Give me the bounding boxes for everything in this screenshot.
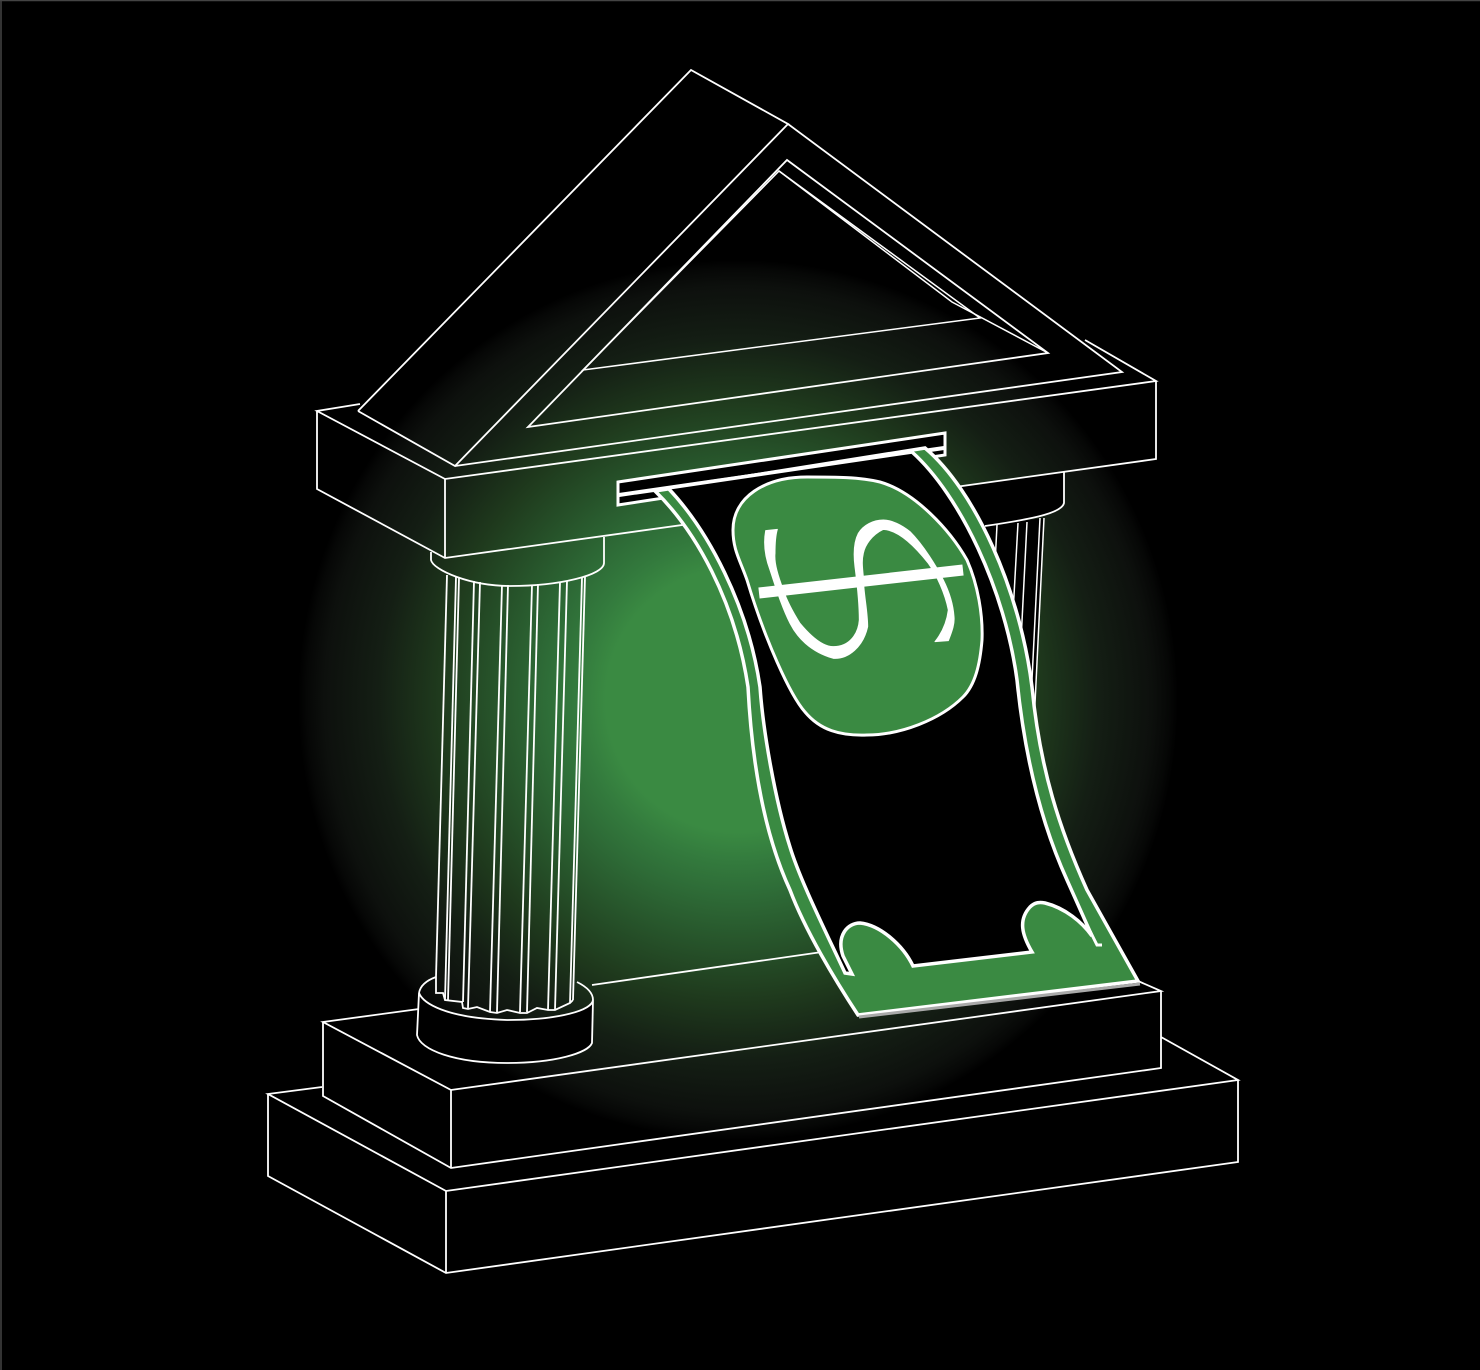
left column base [417,977,593,1063]
right column shaft [985,518,1044,745]
lower base step [268,1037,1238,1273]
roof outer slopes [358,70,788,466]
right column [955,472,1064,745]
right column flutes [988,518,1044,745]
bill green border [655,448,1138,1015]
dollar medallion [733,477,982,735]
cash slot [618,433,945,505]
dollar sign [759,520,963,658]
right column capital [955,472,1064,531]
bill corner foot [1090,931,1102,945]
bill drop shadow [859,984,1140,1017]
pediment frame [528,160,1048,427]
green glow [298,260,1178,1140]
entablature [317,340,1156,558]
left column shaft with flutes [436,575,585,1012]
dollar bill [655,448,1140,1017]
upper base step [323,952,1161,1168]
left column capital [431,537,604,586]
pediment inner triangle [583,171,980,370]
bill black field with corner notches [668,452,1092,974]
roof [358,70,1122,466]
